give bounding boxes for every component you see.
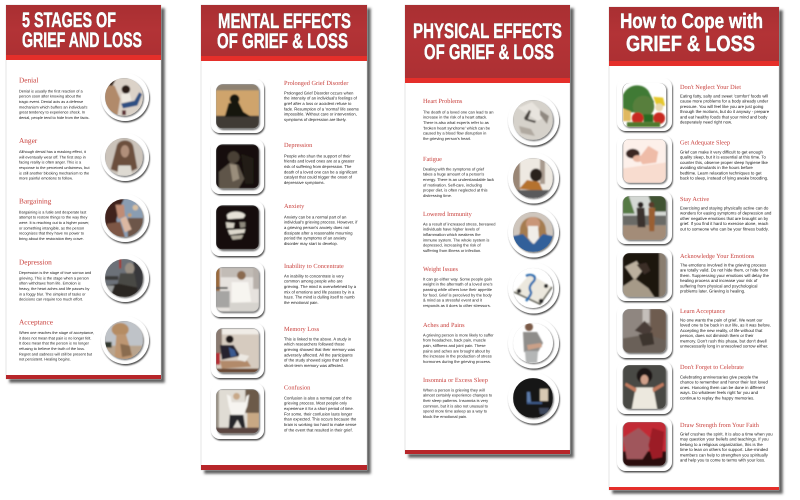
text: inability to concentrate: the emotional pain. bbox=[284, 300, 319, 305]
text: confusion: experience it for a short period of time. bbox=[284, 406, 354, 411]
text: weight issues: It can go either way. Some people gain bbox=[423, 276, 492, 281]
photo: stressed person in a chair bbox=[211, 383, 264, 439]
heading: sleep: Get Adequate Sleep bbox=[680, 140, 730, 146]
panel 4 background bbox=[609, 7, 779, 490]
panel: mental effects of grief and loss bbox=[201, 5, 367, 470]
tip: diet bbox=[617, 78, 770, 131]
text: depression: catalyst that could trigger the onset of bbox=[284, 175, 353, 180]
text: faith: belong to a religious organization, this is the bbox=[680, 442, 763, 447]
text: aches and pains: pains and aches are brought about by bbox=[423, 348, 490, 353]
photo: bathroom scale with tape measure bbox=[508, 262, 559, 314]
panel 2 footer band bbox=[201, 465, 367, 470]
panel 3 title bbox=[413, 20, 562, 64]
panel 4 title: GRIEF & LOSS bbox=[626, 31, 755, 56]
text: celebrate: continue to replay the happy memories. bbox=[680, 395, 754, 400]
text: heart problems: caused by a blood flow disruption in bbox=[423, 131, 486, 136]
heading: confusion: Confusion bbox=[284, 384, 311, 392]
photo: woman at laptop bbox=[211, 262, 264, 317]
text: prolonged grief disorder: symptoms of depression are likely. bbox=[284, 117, 347, 122]
panel 3 header accent stripe bbox=[405, 78, 570, 83]
panel 1 footer band bbox=[6, 375, 161, 379]
effect: memory loss bbox=[211, 323, 355, 378]
text: depression: decisions can require too much effort. bbox=[19, 298, 83, 302]
text: depression: Depression is the stage of true sorrow and bbox=[19, 271, 91, 275]
effect: weight issues bbox=[423, 262, 559, 314]
text: fatigue: Dealing with the symptoms of grief bbox=[423, 166, 485, 171]
text: depression: grieving. This is the stage when a person bbox=[19, 276, 89, 280]
text: diet: pressure. You will feel like you are just going bbox=[680, 104, 764, 109]
text: memory loss: grieving showed that their memory was bbox=[284, 347, 355, 352]
text: weight issues: for food. Grief is perceived by the body bbox=[423, 292, 492, 297]
text: anxiety: a grieving person's anxiety does not bbox=[284, 225, 350, 230]
text: sleep: bedtime. Learn relaxation techniques to get bbox=[680, 170, 762, 175]
text: diet: desperately need right now. bbox=[680, 120, 732, 125]
heading: learn acceptance: Learn Acceptance bbox=[680, 308, 725, 315]
effect: lowered immunity bbox=[423, 206, 559, 258]
heading: prolonged grief disorder: Prolonged Grief Disorder bbox=[284, 80, 349, 87]
text: stay active: grief. If you find it hard to exercise alone, reach bbox=[680, 221, 769, 226]
effect: anxiety bbox=[211, 201, 358, 256]
effect: fatigue bbox=[423, 152, 559, 204]
panel 4 footer band bbox=[609, 487, 779, 490]
text: acknowledge emotions: healing process and increase your risk of bbox=[680, 278, 758, 283]
text: confusion: than expected. This occurs because the bbox=[284, 417, 357, 422]
text: confusion: of the event that resulted in their grief. bbox=[284, 427, 353, 432]
photo: woman on a train bbox=[101, 254, 149, 302]
photo: silhouette at sunset bbox=[211, 79, 264, 133]
heading: weight issues: Weight Issues bbox=[423, 266, 459, 273]
text: insomnia or excess sleep: common, but it is also not unusual to bbox=[423, 403, 489, 408]
photo: muted figure by a window bbox=[617, 304, 672, 358]
text: confusion: Confusion is also a normal part of the bbox=[284, 395, 353, 400]
text: acceptance: It does mean that the person is no longer bbox=[19, 342, 90, 346]
text: celebrate: ones. Honoring them can be done in different bbox=[680, 385, 766, 390]
text: acceptance: not persistent. Healing begins. bbox=[19, 358, 71, 362]
text: denial: mechanism which buffers an individual's bbox=[19, 105, 87, 109]
panel 4 title: How to Cope with bbox=[620, 10, 763, 33]
text: insomnia or excess sleep: almost certainly experience changes to bbox=[423, 393, 493, 398]
heading: bargaining: Bargaining bbox=[19, 196, 52, 206]
text: prolonged grief disorder: fade. Resumption of a 'normal' life seems bbox=[284, 106, 359, 111]
photo: woman in sun hat bbox=[101, 316, 149, 364]
text: learn acceptance: loved one to be back in our life, as it was before. bbox=[680, 323, 771, 328]
text: anxiety: Anxiety can be a normal part of an bbox=[284, 214, 347, 219]
text: faith: and help you to come to terms with your loss. bbox=[680, 458, 765, 463]
text: sleep: Grief can make it very difficult to get enough bbox=[680, 149, 763, 154]
panel 4 title bbox=[620, 10, 763, 56]
photo: sepia couple embracing bbox=[211, 139, 264, 194]
tip: learn acceptance bbox=[617, 304, 771, 358]
text: lowered immunity: immune system. The whole system is bbox=[423, 237, 489, 242]
text: aches and pains: pain, stiffness and joint pain. These bbox=[423, 343, 486, 348]
heading: lowered immunity: Lowered Immunity bbox=[423, 211, 473, 218]
photo: high contrast face bbox=[211, 201, 264, 256]
text: insomnia or excess sleep: spend more time asleep as a way to bbox=[423, 409, 488, 414]
panel 3 background bbox=[405, 5, 570, 454]
text: weight issues: & mind as a stressful event and it bbox=[423, 298, 483, 303]
text: fatigue: proper diet, is often neglected at this bbox=[423, 188, 487, 193]
text: acknowledge emotions: them. Suppressing your emotions will delay the bbox=[680, 273, 769, 278]
text: fatigue: takes a huge amount of a person's bbox=[423, 172, 484, 177]
tip: sleep bbox=[617, 135, 769, 188]
text: acceptance: refusing to believe the truth of the loss. bbox=[19, 347, 85, 351]
panel 1 header band bbox=[6, 5, 161, 55]
panel 3 footer band bbox=[405, 450, 570, 454]
photo: dark bedroom with lit screen bbox=[508, 372, 559, 424]
text: bargaining: attempt to restore things to the way they bbox=[19, 216, 87, 220]
text: celebrate: chance to remember and honor their lost loved bbox=[680, 380, 769, 385]
heading: faith: Draw Strength from Your Faith bbox=[680, 422, 760, 429]
panel: how to cope with grief and loss bbox=[609, 7, 779, 490]
panel 2 title: OF GRIEF & LOSS bbox=[217, 30, 348, 53]
heading: anxiety: Anxiety bbox=[284, 203, 305, 210]
text: memory loss: adversely affected. All the participants bbox=[284, 352, 353, 357]
text: diet: cause more problems for a body already under bbox=[680, 99, 769, 104]
tip: celebrate bbox=[617, 361, 769, 414]
effect: confusion bbox=[211, 383, 357, 439]
text: acceptance: Regret and sadness will still be present but bbox=[19, 352, 93, 356]
text: insomnia or excess sleep: their sleep patterns. Insomnia is very bbox=[423, 398, 488, 403]
text: aches and pains: hormones during the grieving process. bbox=[423, 359, 491, 364]
text: bargaining: recognizes that they have no power to bbox=[19, 232, 84, 236]
text: learn acceptance: memory. Don't rush this phase, but don't dwell bbox=[680, 338, 767, 343]
text: lowered immunity: inflammation which weakens the bbox=[423, 232, 481, 237]
text: bargaining: bring about the restoration they crave. bbox=[19, 237, 84, 241]
text: sleep: avoiding stimulants in the hours before bbox=[680, 165, 753, 170]
panel 2 header accent stripe bbox=[201, 56, 367, 61]
text: bargaining: or something intangible, as the person bbox=[19, 226, 84, 230]
text: diet: Eating fatty, salty and sweet 'comfort' foods will bbox=[680, 93, 768, 98]
text: denial: great tendency to experience shock. In bbox=[19, 111, 85, 115]
text: depression: depressive symptoms. bbox=[284, 180, 325, 185]
text: inability to concentrate: grieving. The mind is overwhelmed by a bbox=[284, 284, 357, 289]
effect: prolonged grief disorder bbox=[211, 79, 359, 133]
text: confusion: For some, their confusion lasts longer bbox=[284, 411, 353, 416]
text: denial: Denial is usually the first reaction of a bbox=[19, 89, 84, 93]
effect: aches and pains bbox=[423, 318, 559, 368]
text: anxiety: disorder may start to develop. bbox=[284, 241, 338, 246]
stage: denial bbox=[19, 73, 149, 121]
text: lowered immunity: As a result of increased stress, bereaved bbox=[423, 221, 495, 226]
text: lowered immunity: suffering from illness or infection. bbox=[423, 248, 481, 253]
stage: anger bbox=[19, 133, 149, 181]
text: confusion: grieving process. Most people only bbox=[284, 401, 348, 406]
photo: crumpled sheets bbox=[508, 94, 559, 146]
panel 2 background bbox=[201, 5, 367, 470]
stage: bargaining bbox=[19, 194, 149, 242]
tip: stay active bbox=[617, 191, 772, 244]
panel 2 title bbox=[217, 10, 351, 53]
text: memory loss: short-term memory was affected. bbox=[284, 363, 344, 368]
text: depression: death of a loved one can be a significant bbox=[284, 169, 358, 174]
panel 2 header band bbox=[201, 5, 367, 56]
panel 3 title: PHYSICAL EFFECTS bbox=[413, 20, 562, 43]
text: acknowledge emotions: suffering from physical and psychological bbox=[680, 283, 757, 288]
tip: faith bbox=[617, 417, 773, 471]
panel 1 background bbox=[6, 5, 161, 379]
photo: woman with long hair bbox=[101, 133, 149, 181]
text: fatigue: distressing time. bbox=[423, 193, 452, 198]
panel 4 header band bbox=[609, 7, 779, 61]
text: heart problems: 'broken heart syndrome' which can be bbox=[423, 125, 491, 130]
effect: heart problems bbox=[423, 94, 559, 146]
text: depression: People who shun the support of their bbox=[284, 153, 351, 158]
heading: depression: Depression bbox=[284, 142, 313, 149]
text: sleep: counter this, observe proper sleep hygiene like bbox=[680, 160, 769, 165]
panel 3 title: OF GRIEF & LOSS bbox=[424, 41, 554, 64]
text: fatigue: of motivation. Self-care, including bbox=[423, 182, 482, 187]
text: denial: person soon after knowing about the bbox=[19, 95, 81, 99]
text: anger: response to the perceived unfairness, but bbox=[19, 166, 90, 170]
text: anger: Although denial has a masking effect, it bbox=[19, 150, 87, 154]
text: anxiety: dissipate after a reasonable mourning bbox=[284, 230, 353, 235]
panel 4 header accent stripe bbox=[609, 61, 779, 66]
photo: couple walking on a street bbox=[617, 191, 672, 244]
stage: acceptance bbox=[19, 316, 149, 364]
text: inability to concentrate: mix of emotions and life passes by in a bbox=[284, 289, 355, 294]
text: depression: friends and loved ones are at a greater bbox=[284, 159, 355, 164]
text: inability to concentrate: An inability to concentrate is very bbox=[284, 273, 345, 278]
text: acknowledge emotions: problems later. Grieving is healing. bbox=[680, 289, 745, 294]
text: lowered immunity: individuals have higher levels of bbox=[423, 227, 480, 232]
text: diet: and eat healthy foods that your mind and body bbox=[680, 114, 768, 119]
text: celebrate: ways. Do whatever feels right for you and bbox=[680, 390, 759, 395]
text: stay active: out to someone who can be your fitness buddy. bbox=[680, 226, 769, 231]
text: denial: denial, people tend to hide from the facts. bbox=[19, 116, 90, 120]
heading: anger: Anger bbox=[19, 136, 38, 145]
photo: woman holding her stomach bbox=[508, 318, 559, 368]
photo: woman reading in a room bbox=[211, 323, 264, 378]
panel 1 title: 5 STAGES OF bbox=[22, 9, 116, 32]
text: aches and pains: from headaches, back pain, muscle bbox=[423, 338, 487, 343]
heading: aches and pains: Aches and Pains bbox=[423, 322, 465, 329]
text: confusion: brain is working too hard to make sense bbox=[284, 422, 357, 427]
text: celebrate: Celebrating anniversaries give people the bbox=[680, 374, 759, 379]
text: aches and pains: A grieving person is more likely to suffer bbox=[423, 332, 494, 337]
text: insomnia or excess sleep: block the emotional pain. bbox=[423, 414, 467, 419]
effect: insomnia or excess sleep bbox=[423, 372, 559, 424]
heading: denial: Denial bbox=[19, 76, 38, 84]
text: memory loss: This is linked to the above. A study in bbox=[284, 336, 352, 341]
text: learn acceptance: Accepting the new reality, of life without that bbox=[680, 328, 763, 333]
photo: fresh vegetables bbox=[617, 78, 672, 131]
text: depression: risk of suffering from depression. The bbox=[284, 164, 352, 169]
photo: woman with tissue bbox=[508, 206, 559, 258]
text: weight issues: responds as it does to other stressors. bbox=[423, 303, 491, 308]
text: learn acceptance: No one wants the pain of grief. We want our bbox=[680, 317, 763, 322]
text: heart problems: the grieving person's heart. bbox=[423, 136, 471, 141]
text: anger: more painful emotions to follow. bbox=[19, 177, 73, 181]
heading: insomnia or excess sleep: Insomnia or Excess Sleep bbox=[423, 377, 488, 384]
text: heart problems: The death of a loved one can lead to an bbox=[423, 109, 494, 114]
text: bargaining: Bargaining is a futile and desperate last bbox=[19, 210, 87, 214]
text: depression: often withdraws from life. Emotion is bbox=[19, 282, 81, 286]
text: learn acceptance: unnecessarily long in unresolved sorrow either. bbox=[680, 344, 768, 349]
photo: woman shrugging in white sweater bbox=[617, 361, 672, 414]
photo: woman sleeping bbox=[617, 135, 672, 188]
text: fatigue: energy. There is an understandable lack bbox=[423, 177, 494, 182]
heading: fatigue: Fatigue bbox=[423, 156, 442, 163]
text: faith: time to lean on others for support. Like-minded bbox=[680, 447, 769, 452]
text: weight issues: weight in the aftermath of a loved one's bbox=[423, 282, 492, 287]
text: memory loss: which researchers followed those bbox=[284, 342, 345, 347]
text: bargaining: were. It is reaching out to a higher power, bbox=[19, 221, 89, 225]
heading: depression: Depression bbox=[19, 258, 52, 266]
text: acceptance: When one reaches the stage of acceptance, bbox=[19, 331, 94, 335]
text: depression: heavy, the heart aches and life passes by bbox=[19, 287, 90, 291]
photo: woman sitting on sofa bbox=[101, 73, 149, 121]
photo: tired woman at a table bbox=[508, 152, 559, 204]
text: memory loss: of the study showed signs that their bbox=[284, 358, 349, 363]
text: faith: Grief crushes the spirit. It is also a time when you bbox=[680, 431, 773, 436]
text: anxiety: period the symptoms of an anxiety bbox=[284, 236, 347, 241]
text: inability to concentrate: common among people who are bbox=[284, 279, 343, 284]
heading: diet: Don't Neglect Your Diet bbox=[680, 84, 741, 91]
text: learn acceptance: person, does not diminish them or their bbox=[680, 333, 754, 338]
tip: acknowledge emotions bbox=[617, 248, 769, 301]
heading: inability to concentrate: Inability to Concentrate bbox=[284, 263, 344, 270]
heading: stay active: Stay Active bbox=[680, 196, 709, 203]
text: depression: in a foggy blur. The simplest of tasks or bbox=[19, 292, 86, 296]
panel: 5 stages of grief and loss bbox=[6, 5, 161, 379]
panel 1 title bbox=[22, 9, 142, 52]
text: anger: is still another blocking mechanism to the bbox=[19, 171, 89, 175]
effect: depression bbox=[211, 139, 358, 194]
text: prolonged grief disorder: grief after a loss or accident refuse to bbox=[284, 101, 352, 106]
text: acknowledge emotions: are totally valid. Do not hide them, or hide from bbox=[680, 268, 769, 273]
panel 2 title: MENTAL EFFECTS bbox=[218, 10, 351, 33]
heading: acceptance: Acceptance bbox=[19, 318, 53, 326]
text: acceptance: it does not mean that pain is no longer felt. bbox=[19, 336, 91, 340]
heading: memory loss: Memory Loss bbox=[284, 326, 320, 333]
text: stay active: other negative emotions that are brought on by bbox=[680, 216, 769, 221]
text: lowered immunity: depressed, increasing the risk of bbox=[423, 243, 481, 248]
heading: acknowledge emotions: Acknowledge Your Emotions bbox=[680, 253, 755, 260]
text: stay active: Exercising and staying physically active can do bbox=[680, 205, 769, 210]
panel 1 title: GRIEF AND LOSS bbox=[22, 29, 142, 52]
text: diet: through the motions, but do it anyway - prepare bbox=[680, 109, 770, 114]
text: anger: facing reality is often anger. This is a bbox=[19, 161, 82, 165]
panel 1 header accent stripe bbox=[6, 55, 161, 60]
effect: inability to concentrate bbox=[211, 262, 357, 317]
photo: woman covering her face bbox=[617, 248, 672, 301]
photo: woman praying bbox=[101, 194, 149, 242]
text: aches and pains: the increase in the production of stress bbox=[423, 354, 492, 359]
text: anxiety: individual's grieving process. However, if bbox=[284, 220, 358, 225]
photo: holy book on red bbox=[617, 417, 672, 471]
text: inability to concentrate: haze. The mind is dulling itself to numb bbox=[284, 295, 355, 300]
text: denial: tragic event. Denial acts as a defense bbox=[19, 100, 83, 104]
text: stay active: wonders for easing symptoms of depression and bbox=[680, 211, 772, 216]
text: prolonged grief disorder: impossible. Without care or intervention, bbox=[284, 112, 357, 117]
text: weight issues: passing while others lose their appetite bbox=[423, 287, 493, 292]
text: faith: members can help to strengthen you spiritually bbox=[680, 452, 769, 457]
text: prolonged grief disorder: the intensity of an individual's feelings of bbox=[284, 96, 358, 101]
text: sleep: quality sleep, but it is essential at this time. To bbox=[680, 155, 767, 160]
text: heart problems: There is also what experts refer to as bbox=[423, 120, 489, 125]
heading: heart problems: Heart Problems bbox=[423, 98, 463, 105]
stage: depression bbox=[19, 254, 149, 302]
text: sleep: back to sleep, instead of lying awake brooding. bbox=[680, 176, 768, 181]
panel: physical effects of grief and loss bbox=[405, 5, 570, 454]
text: prolonged grief disorder: Prolonged Grief Disorder occurs when bbox=[284, 90, 354, 95]
text: insomnia or excess sleep: When a person is grieving they will bbox=[423, 387, 485, 392]
panel 3 header band bbox=[405, 5, 570, 78]
text: faith: may question your beliefs and teachings. If you bbox=[680, 437, 769, 442]
text: anger: will eventually wear off. The first step in bbox=[19, 155, 86, 159]
heading: celebrate: Don't Forget to Celebrate bbox=[680, 364, 744, 371]
text: heart problems: increase in the risk of a heart attack. bbox=[423, 115, 487, 120]
text: acknowledge emotions: The emotions involved in the grieving process bbox=[680, 262, 766, 267]
